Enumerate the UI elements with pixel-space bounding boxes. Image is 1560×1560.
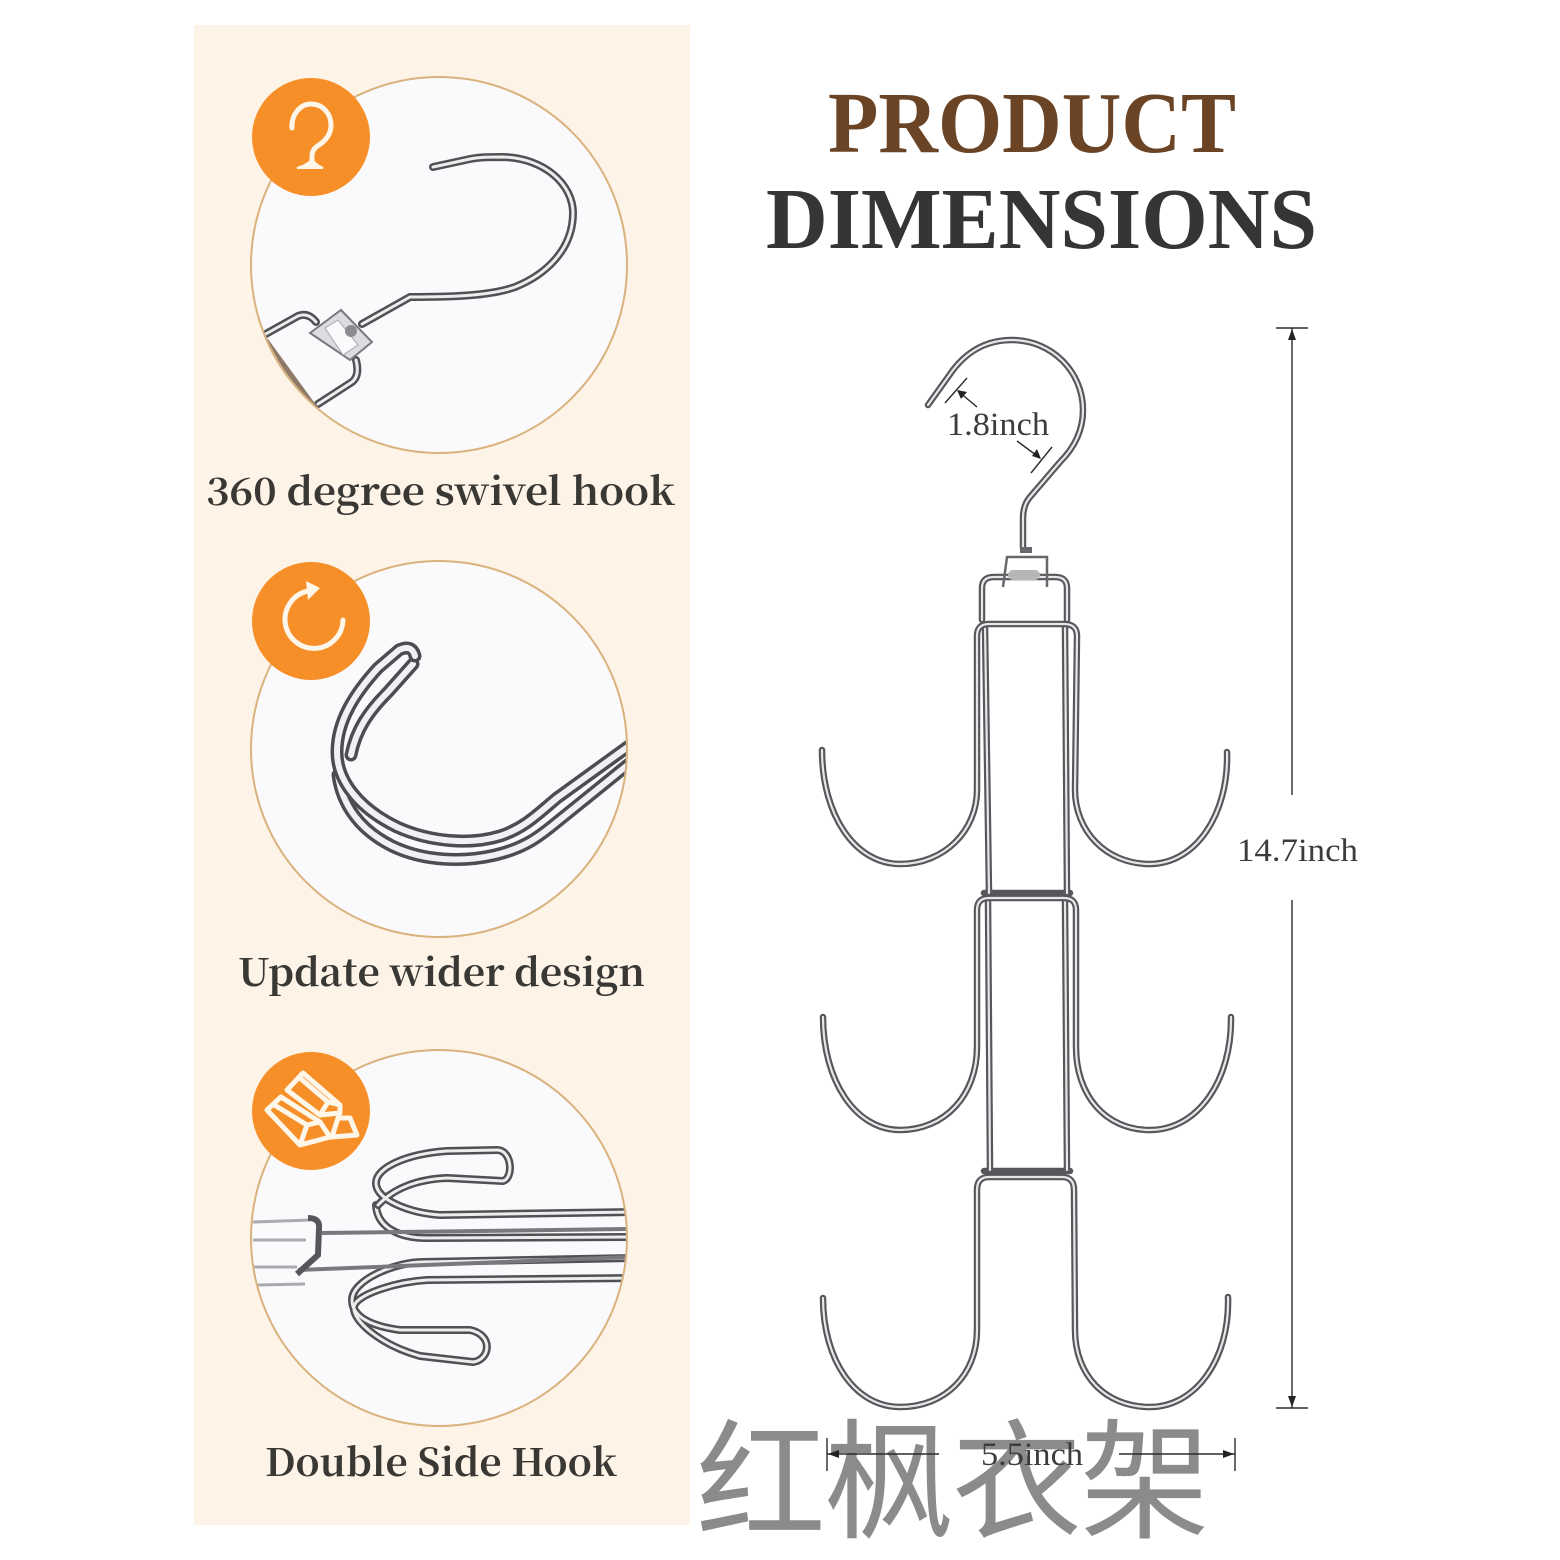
icon: rotate badge (252, 562, 370, 680)
dimension: hook opening 1.8inch (945, 378, 1052, 473)
feature photo: double side hook (251, 1050, 630, 1426)
feature photo: swivel hook (251, 77, 627, 453)
panel: features background (194, 25, 690, 1525)
dimension: height 14.7inch (1237, 328, 1359, 1408)
label: double side hook: Double Side Hook (265, 1432, 617, 1487)
dimension: width 5.5inch: 5.5inch (981, 1437, 1084, 1473)
icon: hook badge (252, 78, 370, 196)
product hanger (822, 340, 1231, 1407)
feature photo: wider hook (251, 561, 640, 937)
label: 360 degree swivel hook: 360 degree swivel hook (206, 461, 675, 516)
icon: gold bars badge (252, 1052, 370, 1170)
title: dimensions: DIMENSIONS (766, 170, 1317, 267)
label: update wider design: Update wider design (238, 942, 645, 997)
dimension: width 5.5inch (827, 1437, 1235, 1473)
dimension: height 14.7inch: 14.7inch (1237, 833, 1359, 869)
title: product: PRODUCT (828, 74, 1236, 171)
dimension: hook opening 1.8inch: 1.8inch (947, 407, 1050, 443)
